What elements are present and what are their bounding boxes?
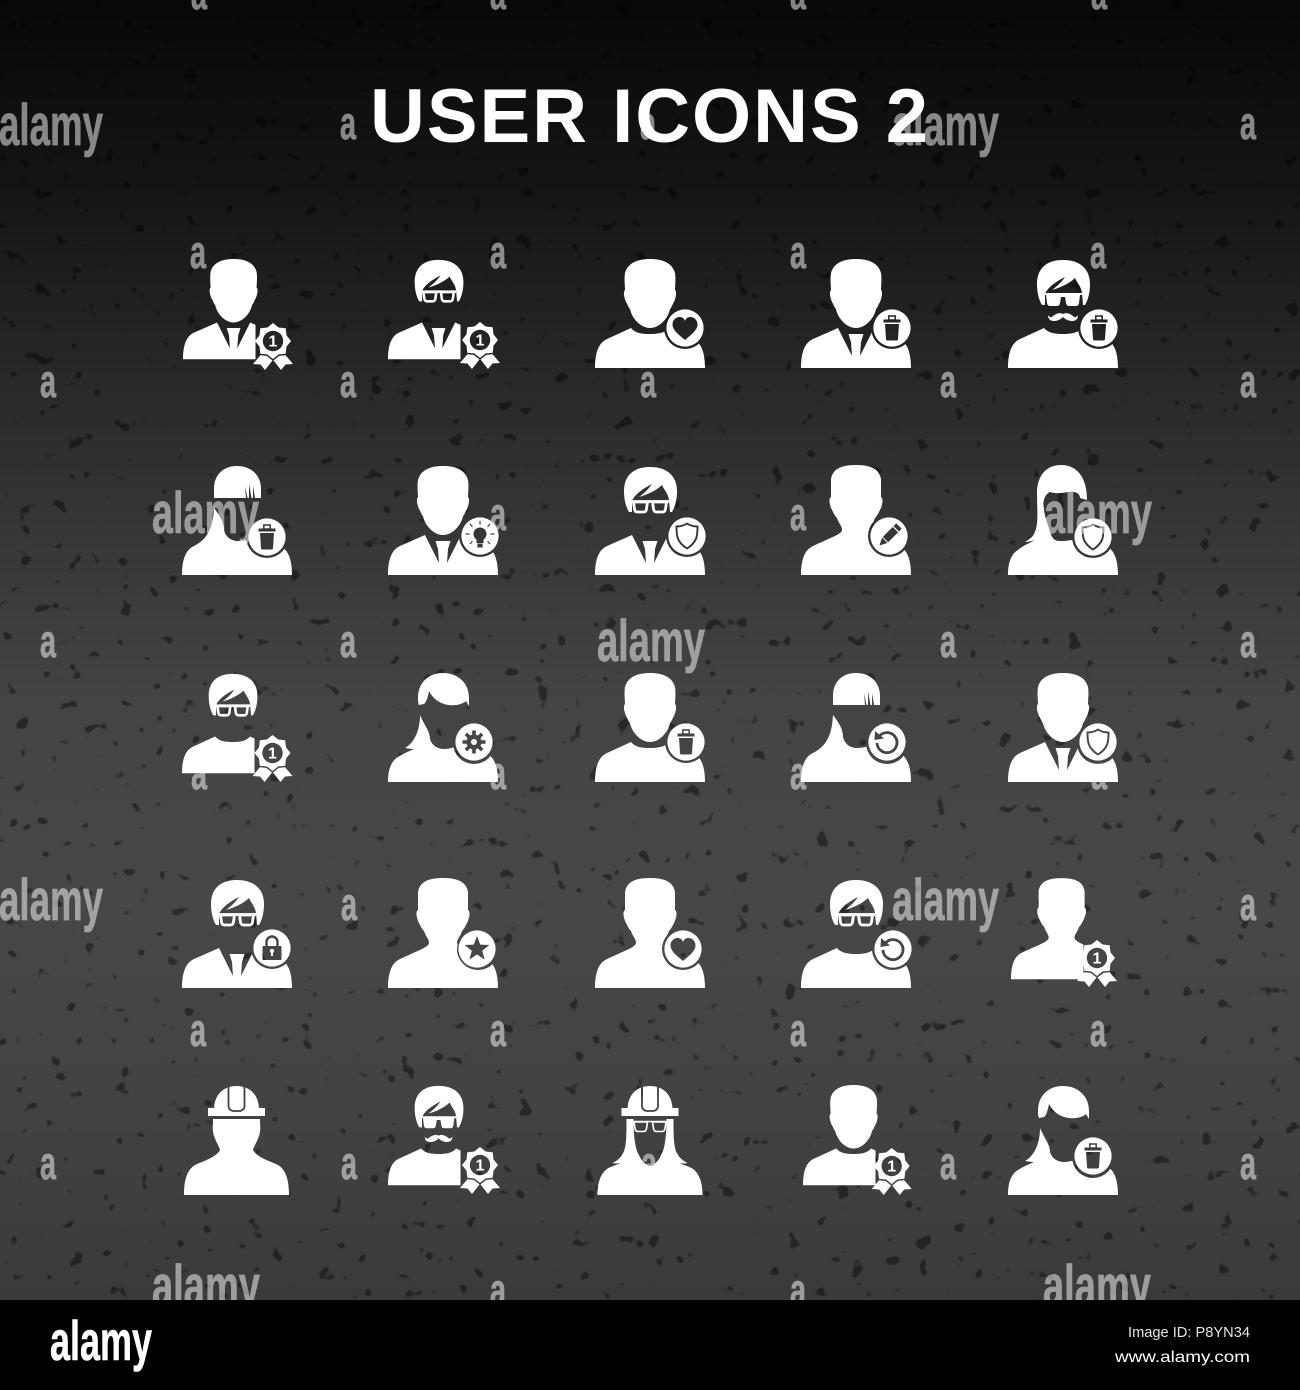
watermarks: a	[641, 1137, 657, 1189]
watermarks: a	[790, 1004, 806, 1056]
watermarks: a	[1240, 878, 1256, 930]
watermarks: a	[940, 1137, 956, 1189]
icon: woman with bob and gear badge	[388, 673, 498, 782]
watermarks: a	[640, 97, 656, 149]
watermarks: a	[790, 1264, 806, 1316]
watermarks: alamy	[152, 481, 259, 546]
watermarks: a	[940, 355, 956, 407]
watermarks: a	[1090, 226, 1106, 278]
icon: man with trash badge	[595, 673, 705, 782]
watermarks: a	[490, 747, 506, 799]
watermarks: alamy	[1044, 481, 1152, 546]
watermarks: a	[1240, 1137, 1256, 1189]
watermarks: a	[341, 1137, 357, 1189]
icon: man silhouette with award ribbon	[1011, 878, 1117, 987]
icon: man silhouette with heart badge	[595, 878, 705, 988]
watermarks: a	[940, 615, 956, 667]
watermarks: a	[1240, 355, 1256, 407]
watermarks: alamy	[1043, 1254, 1151, 1319]
watermarks: alamy	[0, 868, 103, 933]
icon: suited man with glasses and lock badge	[182, 880, 292, 988]
watermarks: a	[1240, 97, 1256, 149]
icon: woman with fringe and rotate badge	[801, 673, 911, 782]
icon: woman with bob and trash badge	[1008, 1086, 1118, 1195]
icon: man with award ribbon	[803, 1085, 912, 1195]
watermarks: a	[40, 615, 56, 667]
icon: suited man with award ribbon	[183, 259, 293, 370]
icon: suited man with light bulb badge	[388, 466, 499, 575]
icon: suited man with glasses and award ribbon	[388, 260, 500, 369]
footer logo: alamy	[50, 1309, 152, 1372]
watermarks: a	[640, 355, 656, 407]
icon: man with glasses and award ribbon	[182, 674, 292, 782]
watermarks: a	[1240, 615, 1256, 667]
icon grid	[182, 259, 1118, 1195]
watermarks: alamy	[597, 609, 705, 674]
icon: woman in hard hat with glasses	[598, 1086, 702, 1195]
watermarks: a	[340, 615, 356, 667]
icon: suited man with glasses and shield badge	[595, 467, 706, 575]
icon: woman with fringe and trash badge	[182, 466, 292, 575]
watermarks: a	[341, 878, 357, 930]
image id: Image ID: P8YN34	[1128, 1324, 1250, 1341]
watermarks: a	[190, 1004, 206, 1056]
icon: man in hard hat	[184, 1086, 289, 1195]
watermarks: a	[790, 488, 806, 540]
watermarks: a	[1091, 747, 1107, 799]
watermarks: a	[40, 1137, 56, 1189]
watermarks: alamy	[0, 93, 103, 158]
icon: man silhouette with star badge	[388, 878, 498, 988]
watermarks: a	[490, 1264, 506, 1316]
icon: suited man with shield badge	[1008, 673, 1118, 782]
watermarks: a	[40, 355, 56, 407]
watermarks: a	[1090, 1004, 1106, 1056]
watermarks: a	[340, 355, 356, 407]
icon: long haired woman with shield badge	[1008, 465, 1118, 575]
watermarks: a	[490, 488, 506, 540]
icon: suited man with trash badge	[801, 259, 911, 368]
icon: moustached man with trash badge	[1008, 260, 1118, 368]
footer bar	[0, 1300, 1300, 1390]
watermarks: alamy	[152, 1254, 260, 1319]
watermarks: a	[790, 226, 806, 278]
website: www.alamy.com	[1114, 1349, 1250, 1366]
watermarks: a	[190, 226, 206, 278]
watermarks: a	[490, 226, 506, 278]
title: USER ICONS 2	[370, 74, 928, 159]
icon: man silhouette with pencil badge	[801, 465, 911, 575]
watermarks: a	[790, 747, 806, 799]
icon: man with glasses and rotate badge	[801, 880, 912, 988]
watermarks: a	[191, 747, 207, 799]
watermarks: alamy	[892, 93, 999, 158]
icon: moustached man with award ribbon	[388, 1086, 500, 1194]
icon: man with heart badge	[595, 259, 705, 368]
watermarks: alamy	[892, 868, 999, 933]
watermarks: a	[340, 97, 356, 149]
watermarks: a	[490, 1004, 506, 1056]
